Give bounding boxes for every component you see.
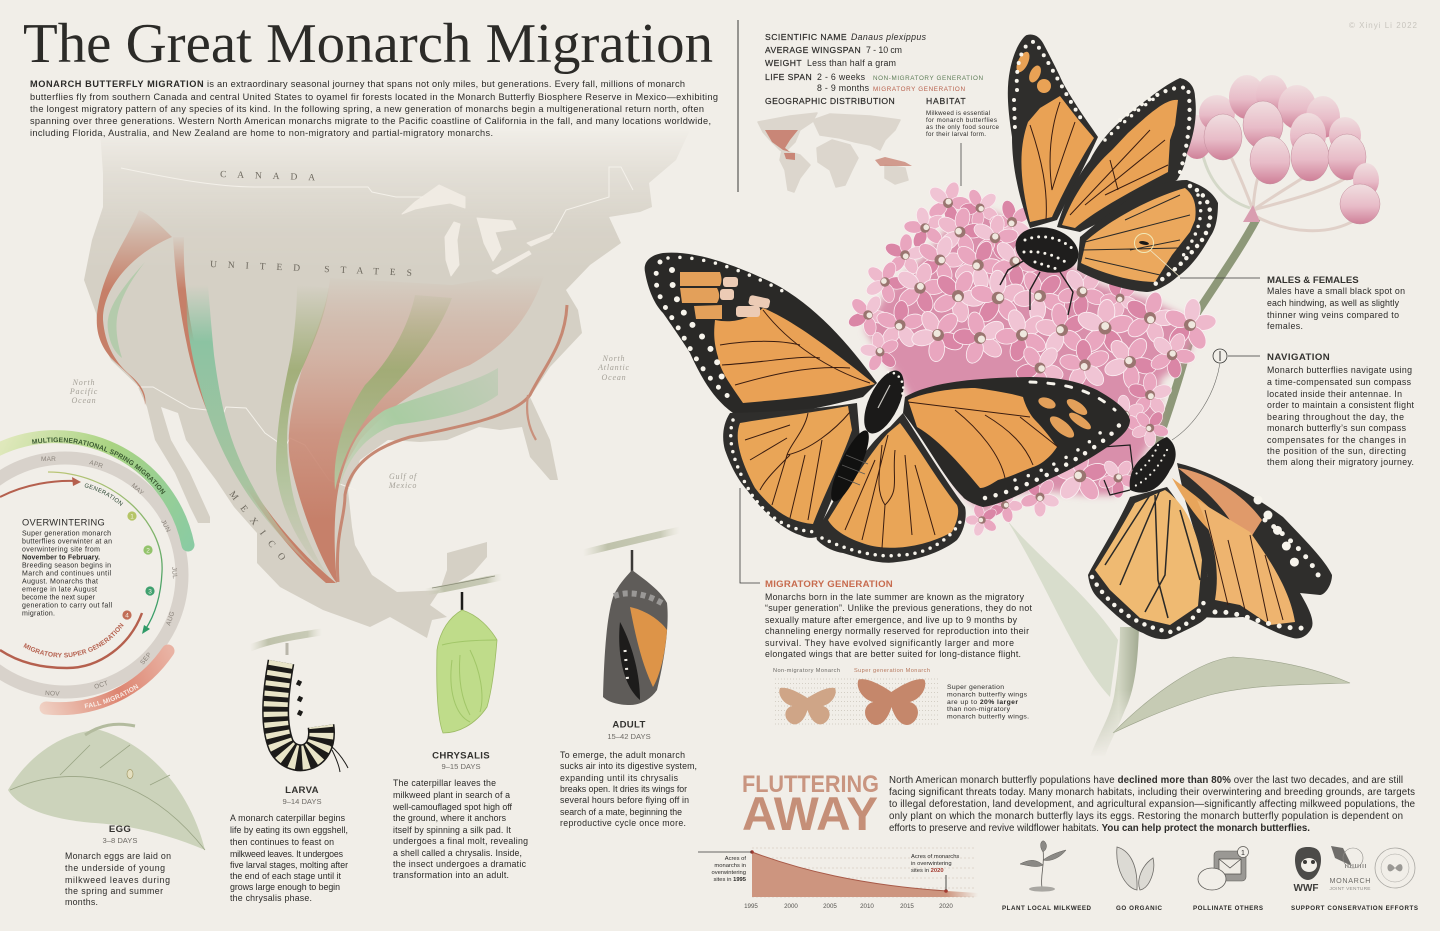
callout: migratory generation: MIGRATORY GENERATION: [765, 579, 893, 590]
panel: species facts: 7 - 10 cm: [866, 45, 902, 55]
threats paragraph: to illegal deforestation, land development, and agricultural expansion—significantly affecting milkweed populations, the: [889, 799, 1415, 810]
overwintering text: November to February.: [22, 554, 100, 562]
borders: [121, 167, 633, 490]
left pale leaf: [1007, 520, 1118, 697]
map labels: UNITED STATES: [210, 260, 412, 279]
icon: WWF logo: WWF: [1294, 883, 1318, 894]
map labels: Gulf of: [389, 472, 418, 481]
egg text: [65, 824, 171, 907]
panel: species facts: 8 - 9 months: [817, 83, 870, 93]
overwintering text: become the next super: [22, 594, 96, 602]
threats paragraph: North American monarch butterfly populations have declined more than 80% over the last two decades, and are still: [889, 775, 1403, 786]
panel: species facts: 2 - 6 weeks: [817, 72, 866, 82]
wing size comparison: are up to 20% larger: [947, 699, 1018, 706]
stage: larva illustration: [250, 632, 348, 772]
panel: species facts: GEOGRAPHIC DISTRIBUTION: [765, 96, 895, 106]
right leaf: [1113, 657, 1350, 733]
right forewing: [903, 377, 1130, 507]
icon: mail and chat: 1: [1241, 850, 1245, 857]
overwintering text: Super generation monarch: [22, 530, 111, 538]
super generation arc: [0, 613, 142, 668]
wing size comparison: Super generation: [947, 684, 1004, 691]
threats paragraph: only plant on which the monarch butterfly lays its eggs. Restoring the monarch butterfly population is dependent on: [889, 811, 1403, 822]
leaf: [8, 730, 205, 850]
chart right label: Acres of monarchs: [911, 854, 959, 860]
months: OCT: [93, 680, 109, 691]
larva text: 9–14 DAYS: [282, 797, 322, 806]
adult text: search of a mate, beginning the: [560, 807, 682, 817]
wing size comparison: Super generation Monarch: [854, 668, 930, 674]
icon: round seal: [1375, 848, 1415, 888]
callout: migratory generation: sexually mature after emergence, and live up to 9 months by: [765, 615, 1018, 625]
map labels: North: [72, 378, 95, 387]
egg text: Monarch eggs are laid on: [65, 851, 171, 861]
callout: navigation: a time-compensated sun compass: [1267, 377, 1412, 387]
wing size comparison: monarch butterfly wings: [947, 692, 1028, 698]
interior routes: [173, 237, 567, 583]
callout: migratory generation: survival. They have evolved significantly larger and more: [765, 638, 1014, 648]
callout: navigation: compensates for the changes in: [1267, 435, 1406, 445]
egg text: the underside of young: [65, 863, 165, 873]
panel: species facts: Danaus plexippus: [851, 32, 927, 42]
callout: migratory generation: “super generation”. Unlike the previous generations, they do not: [765, 603, 1033, 613]
panel: species facts: MIGRATORY GENERATION: [873, 86, 965, 93]
front forewing: [1057, 78, 1196, 232]
callout: migratory generation: channeling energy normally reserved for reproduction into their: [765, 626, 1029, 636]
map labels: Pacific: [69, 387, 98, 396]
icon: monarch joint venture logo: JOINT VENTURE: [1330, 886, 1370, 892]
chrysalis text: a shell called a chrysalis. Inside,: [393, 848, 522, 858]
larva text: grows large enough to begin: [230, 882, 340, 892]
months: MAY: [130, 482, 145, 497]
chart left label: [712, 856, 747, 883]
adult text: several hours before flying off in: [560, 795, 689, 805]
habitat note: for their larval form.: [926, 131, 986, 138]
legs: [1000, 260, 1073, 315]
larva text: the chrysalis phase.: [230, 893, 312, 903]
overwintering text: overwintering site from: [22, 546, 100, 554]
callout: navigation: NAVIGATION: [1267, 352, 1330, 363]
heading: fluttering away: FLUTTERING: [742, 771, 879, 798]
numbered markers: 3: [148, 588, 152, 595]
overwintering text: migration.: [22, 610, 55, 618]
far wings: [1177, 463, 1332, 639]
chart left label: overwintering: [712, 870, 746, 876]
milkweed stem and leaves: [1007, 218, 1350, 757]
egg text: milkweed leaves during: [65, 875, 170, 885]
adult text: reproductive cycle once more.: [560, 818, 686, 828]
action: go organic: [1116, 847, 1163, 912]
chart years: [744, 903, 953, 910]
map labels: Atlantic: [597, 363, 630, 372]
overwintering text: March and continues until: [22, 570, 111, 578]
west coast route: [97, 210, 172, 405]
panel: species facts: WEIGHT: [765, 58, 802, 68]
chrysalis text: the insect undergoes a dramatic: [393, 859, 527, 869]
chart years: 2015: [900, 903, 914, 910]
chrysalis text: transformation into an adult.: [393, 870, 509, 880]
chart years: 2010: [860, 903, 874, 910]
threats paragraph: efforts to preserve and revive wildflower habitats. You can help protect the monarch butterflies.: [889, 823, 1310, 834]
action: pollinate others: [1193, 846, 1263, 912]
callout: navigation: the position of the sun, directing: [1267, 446, 1406, 456]
butterfly 1: large central: [645, 253, 1130, 563]
egg: [127, 770, 133, 778]
callout: migratory generation: Monarchs born in the late summer are known as the migratory: [765, 592, 1025, 602]
numbered markers: 2: [146, 547, 150, 554]
callout: males and females: [1134, 234, 1405, 331]
adult text: 15–42 DAYS: [607, 732, 651, 741]
egg text: months.: [65, 897, 98, 907]
months: AUG: [165, 610, 176, 627]
map labels: North: [602, 354, 625, 363]
intro text block: MONARCH BUTTERFLY MIGRATION is an extraordinary seasonal journey that spans not only miles, but generations. Every fall, millions of monarch: [30, 79, 685, 89]
overwintering text: August. Monarchs that: [22, 578, 98, 586]
callout: navigation: Monarch butterflies navigate using: [1267, 365, 1412, 375]
wing size comparison: Non-migratory Monarch: [773, 668, 840, 674]
heading: fluttering away: AWAY: [742, 787, 878, 840]
chrysalis text: well-camouflaged spot high off: [392, 802, 513, 812]
chrysalis text: itself by spinning a silk pad. It: [393, 825, 512, 835]
months: MAR: [41, 456, 56, 463]
left hindwing: [723, 403, 860, 538]
habitat note: Milkweed is essential: [926, 110, 990, 117]
egg text: the spring and summer: [65, 886, 163, 896]
callout: males and females: MALES & FEMALES: [1267, 275, 1359, 286]
chrysalis text: The caterpillar leaves the: [393, 778, 496, 788]
callout: navigation: bearing throughout the day, the: [1267, 412, 1404, 422]
body: [1130, 437, 1176, 493]
larva text: the end of each stage until it: [230, 871, 342, 881]
chart years: 2005: [823, 903, 837, 910]
stage: chrysalis illustration: [425, 576, 502, 733]
callout: navigation: order to maintain a consistent flight: [1267, 400, 1415, 410]
larva text: A monarch caterpillar begins: [230, 813, 346, 823]
panel: species facts: Less than half a gram: [807, 58, 896, 68]
callout: migratory generation: [740, 488, 1033, 659]
stage: adult pupa illustration: [583, 530, 680, 705]
wing size comparison: [773, 668, 1029, 725]
title: The Great Monarch Migration: [23, 13, 713, 75]
fall migration band: [46, 651, 168, 709]
map labels: Ocean: [72, 396, 96, 405]
overwintering text: OVERWINTERING: [22, 518, 105, 528]
panel: species facts: LIFE SPAN: [765, 72, 812, 82]
wing size comparison: than non-migratory: [947, 706, 1011, 713]
panel: species facts: [765, 32, 983, 106]
map labels: MEXICO: [227, 490, 287, 563]
milkweed buds cluster: [1181, 75, 1380, 231]
numbered markers: [122, 511, 155, 620]
callout: navigation: [1172, 349, 1415, 467]
icon: leaves: [1117, 847, 1154, 890]
panel: species facts: SCIENTIFIC NAME: [765, 32, 847, 42]
map labels: [69, 170, 630, 563]
chart left label: monarchs in: [714, 863, 746, 869]
action: support conservation efforts: [1291, 846, 1418, 912]
callout: males and females: females.: [1267, 321, 1303, 331]
body: [856, 365, 912, 439]
world distribution map: [758, 113, 912, 192]
callout: migratory generation: elongated wings that are better suited for long-distance flight.: [765, 649, 1021, 659]
overwintering text: emerge in late August: [22, 586, 97, 594]
chart right label: in overwintering: [911, 861, 952, 867]
chrysalis text: undergoes a final molt, revealing: [393, 836, 528, 846]
chrysalis text: CHRYSALIS: [432, 750, 490, 762]
larva text: [230, 785, 348, 903]
butterfly 3: lower right side view: [1060, 437, 1332, 639]
near hindwing: [1088, 487, 1211, 639]
action: plant local milkweed: PLANT LOCAL MILKWEED: [1002, 905, 1092, 912]
icon: sprout: [1020, 841, 1066, 892]
months: APR: [88, 459, 104, 470]
map labels: CANADA: [220, 170, 315, 183]
intro text block: including Florida, Australia, and New Zealand are home to non-migratory and partial-migratory monarchs.: [30, 128, 493, 138]
butterfly 2: upper right: [1000, 35, 1218, 315]
overwintering text: butterflies overwinter at an: [22, 538, 112, 546]
land masses: [84, 130, 690, 638]
callout: navigation: monarch butterfly’s sun compass: [1267, 423, 1407, 433]
spring migration band: [0, 437, 188, 545]
intro text block: the longest migratory pattern of any species of its kind. In the following spring, a new generation of monarchs begin a multigenerational return north, often: [30, 104, 704, 114]
habitat note: [926, 96, 1000, 186]
adult text: breaks open. It dries its wings for: [560, 784, 687, 794]
egg text: EGG: [109, 824, 131, 835]
lower flower stem: [1130, 470, 1150, 480]
months: SEP: [139, 651, 153, 666]
panel: generation cycle ring: MIGRATORY SUPER GENERATION: [23, 622, 124, 658]
generation arrow: [48, 472, 162, 630]
adult text: To emerge, the adult monarch: [560, 750, 685, 760]
threats paragraph: [889, 775, 1415, 834]
months: JUL: [170, 567, 178, 579]
action: go organic: GO ORGANIC: [1116, 905, 1163, 912]
map labels: Mexico: [388, 481, 417, 490]
callout: males and females: each hindwing, as well as slightly: [1267, 298, 1400, 308]
larva text: LARVA: [285, 785, 319, 796]
left forewing: [645, 253, 877, 415]
panel: species facts: AVERAGE WINGSPAN: [765, 45, 861, 55]
callout: navigation: them along their migratory journey.: [1267, 457, 1414, 467]
larva text: life by eating its own eggshell,: [230, 825, 348, 835]
chart right label: [911, 854, 959, 874]
upper stem: [1140, 218, 1257, 490]
body: [1010, 220, 1084, 280]
copyright: © Xinyi Li 2022: [1349, 21, 1418, 30]
chart right label: sites in 2020: [911, 868, 944, 874]
intro text block: spanning over three generations. Western North American monarchs migrate to the Pacific coastline of California in the fall, and many locations worldwide,: [30, 116, 711, 126]
adult text: [560, 720, 697, 828]
divider: [737, 20, 739, 192]
larva text: five larval stages, molting after: [230, 860, 348, 870]
month ring: [0, 458, 182, 692]
action: plant local milkweed: [1002, 841, 1092, 912]
chart years: 1995: [744, 903, 758, 910]
panel: generation cycle ring: [0, 430, 194, 716]
months: JUN: [159, 519, 172, 534]
larva text: then continues to feast on: [230, 837, 334, 847]
adult text: expanding until its chrysalis: [560, 773, 679, 783]
action: pollinate others: POLLINATE OTHERS: [1193, 905, 1263, 912]
main stem: [1093, 627, 1139, 750]
habitat note: HABITAT: [926, 96, 966, 106]
map: North America migration routes: [84, 130, 690, 638]
area chart: overwintering acres: [698, 848, 978, 910]
intro text block: [30, 79, 718, 138]
adult text: sucks air into its digestive system,: [560, 761, 697, 771]
band labels: MULTIGENERATIONAL SPRING MIGRATION: [32, 437, 166, 494]
habitat note: for monarch butterflies: [926, 117, 997, 124]
chart years: 2000: [784, 903, 798, 910]
callout: navigation: located inside their antennae. In: [1267, 389, 1402, 399]
threats paragraph: facing significant threats today. Many monarch habitats, including their overwintering and breeding grounds, are targets: [889, 787, 1415, 798]
intro text block: butterflies fly from southern Canada and central United States to oyamel fir forests located in the Monarch Butterfly Biosphere Reserve in Mexico—exhibiting: [30, 92, 718, 102]
wing size comparison: monarch butterfly wings.: [947, 714, 1029, 720]
adult text: ADULT: [612, 720, 646, 730]
chart left label: sites in 1995: [713, 877, 747, 883]
chrysalis text: 9–15 DAYS: [441, 762, 481, 771]
fall arrow top: [0, 481, 76, 497]
overwintering text: Breeding season begins in: [22, 562, 111, 570]
milkweed flower cluster: [844, 174, 1221, 537]
larva text: milkweed leaves. It undergoes: [230, 849, 344, 859]
months: NOV: [45, 690, 60, 698]
map labels: Ocean: [602, 373, 626, 382]
chart years: 2020: [939, 903, 953, 910]
great lakes: [402, 185, 553, 276]
hindwing: [1077, 180, 1218, 292]
chart left label: Acres of: [725, 856, 746, 862]
callout: males and females: thinner wing veins compared to: [1267, 310, 1399, 320]
overwintering text: generation to carry out fall: [22, 602, 112, 610]
months: [41, 456, 178, 698]
chrysalis text: [392, 750, 528, 880]
chrysalis text: the ground, where it anchors: [393, 813, 507, 823]
stage: egg on leaf: [8, 724, 205, 850]
right hindwing: [817, 413, 966, 563]
egg text: 3–8 DAYS: [103, 836, 137, 845]
habitat note: as the only food source: [926, 124, 1000, 131]
panel: species facts: NON-MIGRATORY GENERATION: [873, 75, 983, 82]
panel: generation cycle ring: FALL MIGRATION: [84, 684, 138, 708]
callout: males and females: Males have a small black spot on: [1267, 286, 1405, 296]
numbered markers: 4: [125, 612, 129, 619]
icon: monarch joint venture logo: [1330, 846, 1370, 892]
back forewing: [1008, 35, 1098, 228]
legs: [1060, 445, 1133, 495]
panel: generation cycle ring: GENERATION: [84, 484, 124, 506]
chrysalis text: milkweed plant in search of a: [393, 790, 510, 800]
icon: monarch joint venture logo: MONARCH: [1330, 876, 1370, 885]
action: support conservation efforts: SUPPORT CONSERVATION EFFORTS: [1291, 905, 1418, 912]
overwintering text: [22, 518, 112, 618]
numbered markers: 1: [130, 513, 134, 520]
